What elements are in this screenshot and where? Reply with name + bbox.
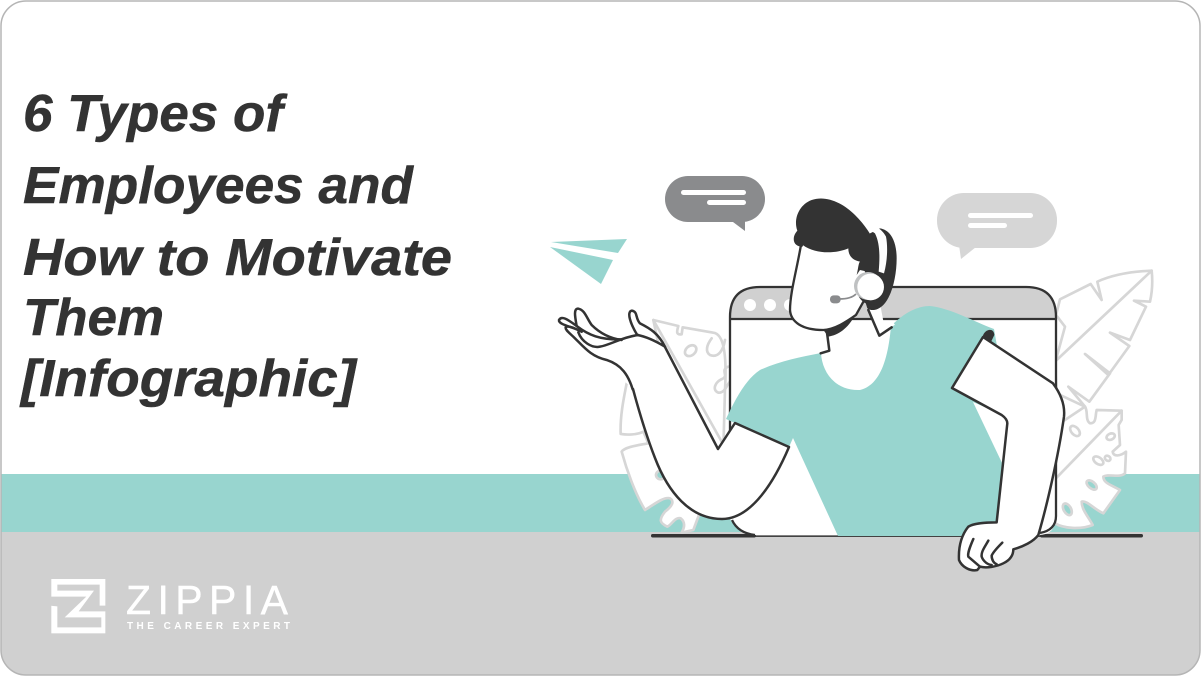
face [790,230,870,330]
hand [559,309,665,389]
logo: Zippia [50,577,290,633]
card background [2,474,1200,674]
speech bubble: dark [665,176,765,231]
left leaf [621,320,730,533]
right monstera leaf [1055,407,1126,528]
speech bubble: light [937,193,1057,259]
title: Them [23,289,164,347]
logo wordmark: ZIPPIA [126,577,289,623]
right arm [952,337,1064,570]
chin shadow [823,315,855,337]
title [19,85,452,408]
neck lines [868,310,892,336]
white shirt fold [973,402,1010,465]
person [559,199,1064,570]
title: [Infographic] [19,350,358,408]
logo icon [50,579,106,633]
neck [867,303,895,336]
logo tagline: THE CAREER EXPERT [127,621,290,632]
hair [794,199,877,275]
neck front line [821,330,829,353]
title: 6 Types of [23,85,288,143]
head and headset [790,199,897,337]
microphone [830,294,856,303]
title: How to Motivate [23,229,452,287]
ear cup [854,272,888,305]
ground line [651,534,1143,538]
title: Employees and [23,157,414,215]
sleeve cuff [983,330,994,343]
browser window [730,287,1056,535]
shirt [726,306,1010,536]
left arm [590,336,789,519]
right banana leaf [1055,271,1152,407]
paper plane [550,239,627,284]
